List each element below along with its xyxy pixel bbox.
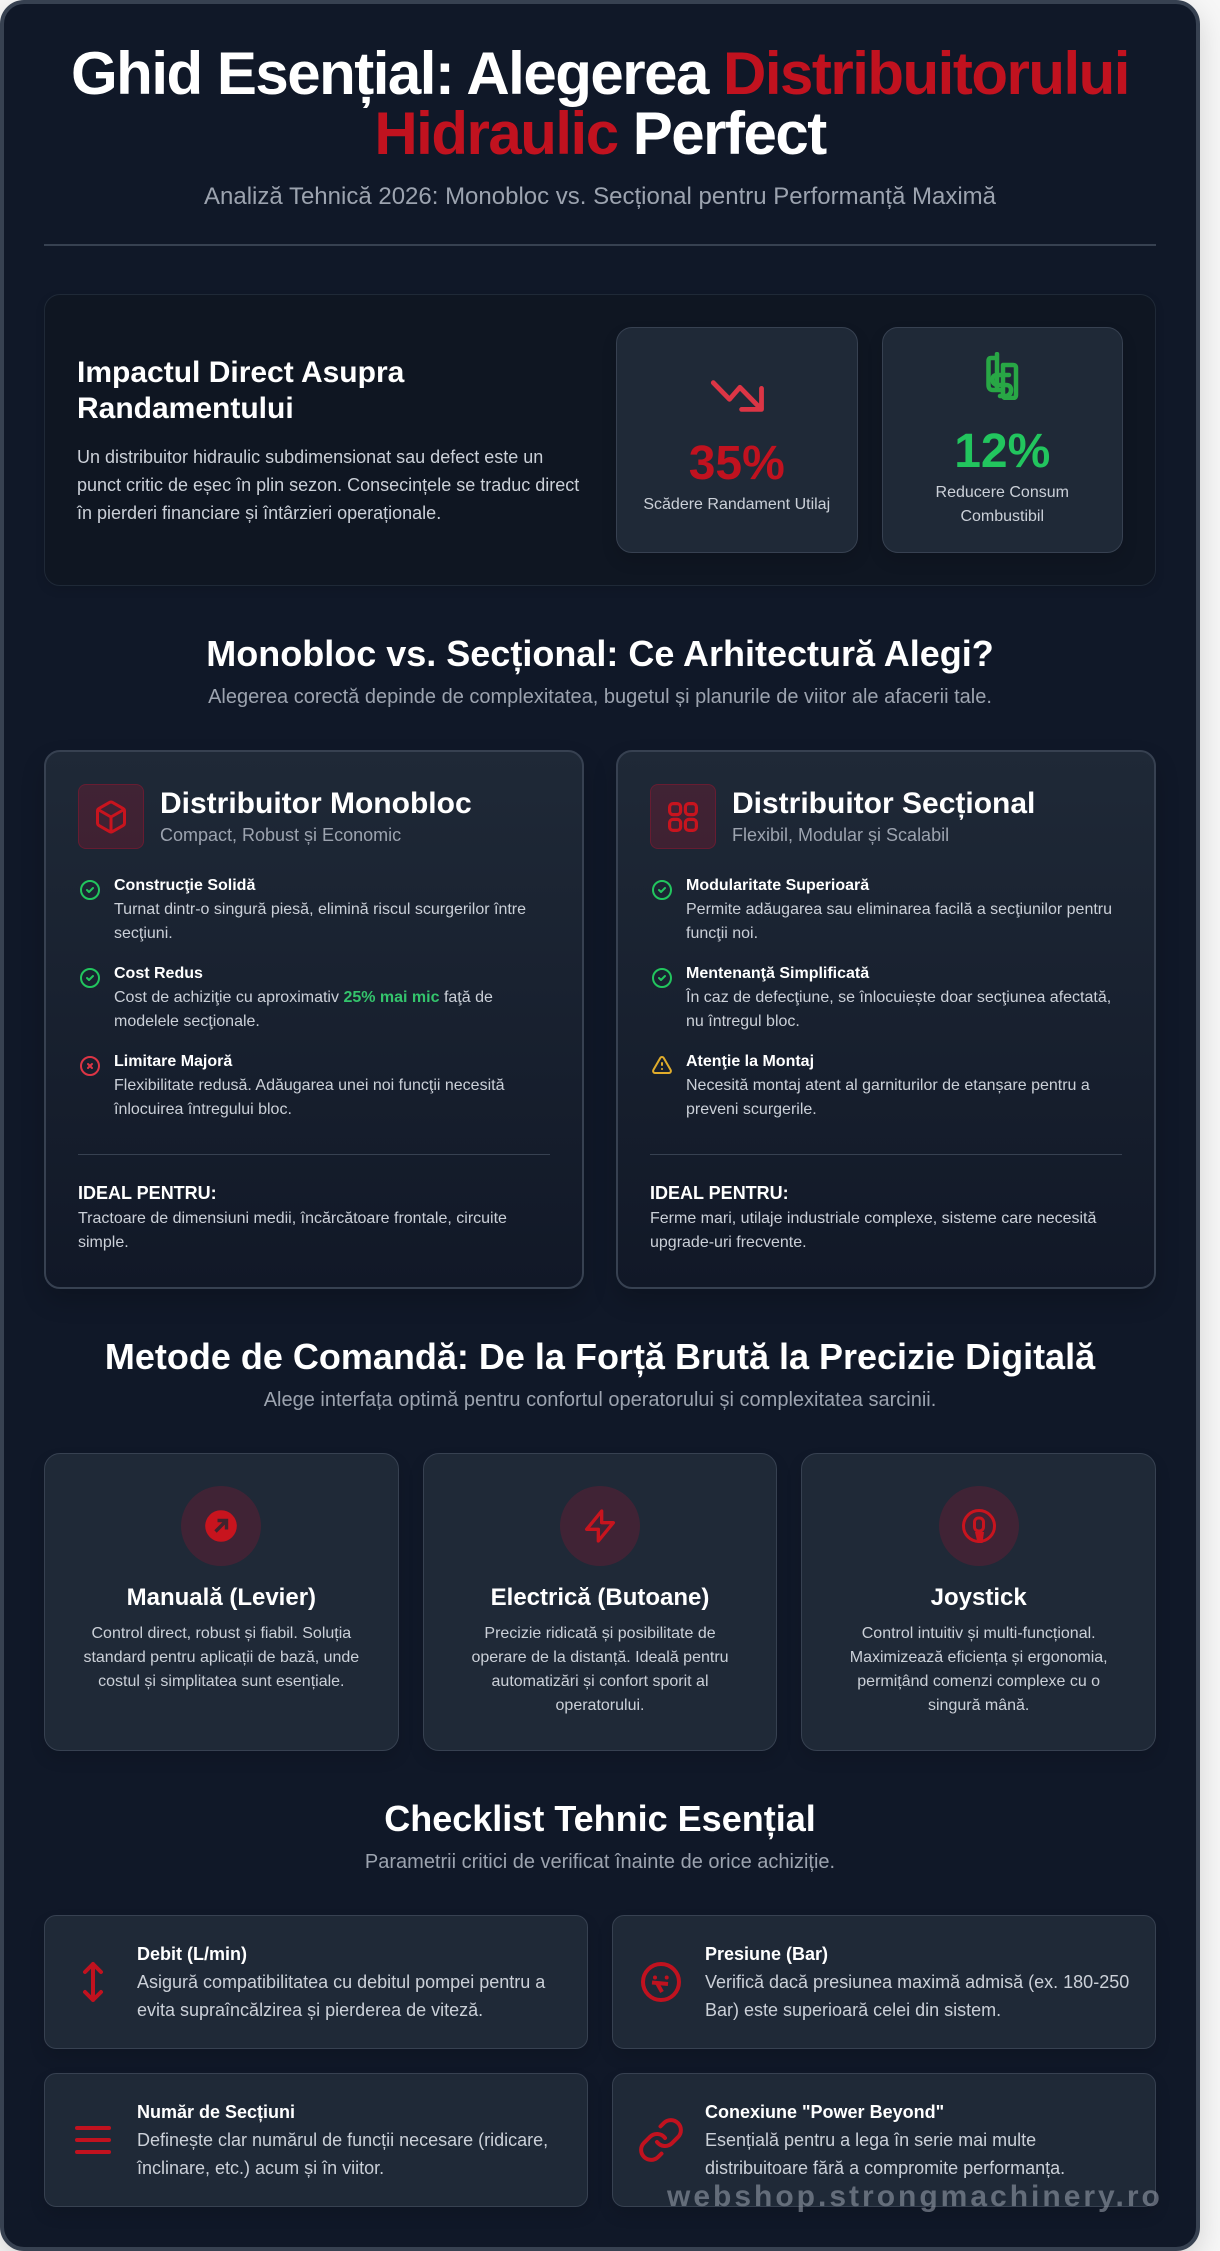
- item text: Esențială pentru a lega în serie mai multe distribuitoare fără a compromite performanța.: [705, 2130, 1065, 2178]
- stat value: 12%: [954, 425, 1050, 478]
- feature: mounting warning: Atenţie la Montaj: [686, 1053, 814, 1070]
- card title: Distribuitor Secțional: [732, 787, 1035, 820]
- impact heading: Impactul Direct Asupra Randamentului: [77, 356, 404, 425]
- panel: sectional: [616, 750, 1156, 1289]
- section heading: control methods: [105, 1336, 1096, 1411]
- item text: Presiune (Bar): [705, 1944, 828, 1964]
- item text: [705, 1944, 1129, 2020]
- section heading: architecture: [206, 633, 994, 708]
- feature: major limitation: Limitare Majoră: [114, 1053, 232, 1070]
- feature: simple maintenance: [652, 965, 1111, 1030]
- item text: Definește clar numărul de funcții necesare (ridicare, înclinare, etc.) acum și în viitor.: [137, 2130, 548, 2178]
- icon: cube: [78, 784, 144, 849]
- card title: Distribuitor Monobloc: [160, 787, 472, 820]
- stat card: 12%: [882, 327, 1123, 553]
- icon: grid: [650, 784, 716, 849]
- feature: low cost: Cost Redus: [114, 965, 203, 982]
- comparison panels: [44, 750, 1156, 1289]
- feature: modularity: Permite adăugarea sau eliminarea facilă a secţiunilor pentru funcţii noi.: [686, 901, 1112, 942]
- ideal for: Tractoare de dimensiuni medii, încărcătoare frontale, circuite simple.: [78, 1210, 507, 1251]
- stat card: 35%: [616, 327, 858, 553]
- icon: joystick: [939, 1486, 1019, 1566]
- feature: low cost: Cost de achiziţie cu aproximativ 25% mai mic faţă de modelele secţionale.: [114, 989, 493, 1030]
- section heading: checklist: [365, 1798, 835, 1873]
- item text: Număr de Secțiuni: [137, 2102, 295, 2122]
- item text: Asigură compatibilitatea cu debitul pompei pentru a evita supraîncălzirea și pierderea de viteză.: [137, 1972, 545, 2020]
- icon: trending down: [710, 380, 764, 412]
- item text: Debit (L/min): [137, 1944, 247, 1964]
- feature: solid build: Construcţie Solidă: [114, 877, 255, 894]
- card title: [160, 787, 472, 845]
- icon: money: [986, 352, 1018, 400]
- feature: solid build: Turnat dintr-o singură piesă, elimină riscul scurgerilor între secţiuni.: [114, 901, 526, 942]
- card header: [650, 784, 1035, 849]
- panel: section count: [44, 2073, 588, 2207]
- panel: monobloc: [44, 750, 584, 1289]
- card header: [78, 784, 472, 849]
- subtitle: Analiză Tehnică 2026: Monobloc vs. Secțional pentru Performanță Maximă: [204, 183, 996, 210]
- panel: manual: [44, 1453, 399, 1751]
- card title: Compact, Robust și Economic: [160, 825, 401, 845]
- header block: [44, 44, 1156, 246]
- subheading: Alege interfața optimă pentru confortul operatorului și complexitatea sarcinii.: [264, 1389, 936, 1411]
- item text: Conexiune "Power Beyond": [705, 2102, 944, 2122]
- feature: mounting warning: [652, 1053, 1090, 1118]
- watermark: webshop.strongmachinery.ro: [667, 2180, 1163, 2213]
- impact paragraph: Un distribuitor hidraulic subdimensionat sau defect este un punct critic de eșec în plin sezon. Consecințele se traduc direct în pierderi financiare și întârzieri operaționale.: [77, 447, 579, 523]
- feature: major limitation: [80, 1053, 505, 1118]
- subheading: Alegerea corectă depinde de complexitatea, bugetul și planurile de viitor ale afacerii tale.: [208, 686, 992, 708]
- panel: pressure: [612, 1915, 1156, 2049]
- panel: joystick: [801, 1453, 1156, 1751]
- icon: up-down arrow: [82, 1962, 104, 2002]
- title: Ghid Esențial: Alegerea Distribuitorului Hidraulic Perfect: [71, 40, 1129, 167]
- method title: Electrică (Butoane): [491, 1584, 709, 1611]
- icon: gauge: [641, 1962, 681, 2002]
- feature: modularity: Modularitate Superioară: [686, 877, 869, 894]
- stat label: Reducere Consum Combustibil: [936, 484, 1069, 525]
- heading: Metode de Comandă: De la Forță Brută la Precizie Digitală: [105, 1336, 1095, 1377]
- feature list: [78, 874, 550, 1155]
- feature list: [650, 874, 1122, 1155]
- ideal for: Ferme mari, utilaje industriale complexe, sisteme care necesită upgrade-uri frecvente.: [650, 1210, 1096, 1251]
- method text: Control direct, robust și fiabil. Soluția standard pentru aplicații de bază, unde costul și simplitatea sunt esențiale.: [83, 1625, 359, 1690]
- icon: chain link: [639, 2118, 683, 2162]
- control method cards: [44, 1453, 1156, 1751]
- stat label: Scădere Randament Utilaj: [643, 496, 830, 513]
- method title: Manuală (Levier): [127, 1584, 316, 1611]
- subheading: Parametrii critici de verificat înainte de orice achiziție.: [365, 1851, 835, 1873]
- ideal for: IDEAL PENTRU:: [650, 1183, 789, 1203]
- heading: Monobloc vs. Secțional: Ce Arhitectură Alegi?: [206, 633, 994, 674]
- icon: lightning: [560, 1486, 640, 1566]
- stat value: 35%: [689, 437, 785, 490]
- feature: major limitation: Flexibilitate redusă. Adăugarea unei noi funcţii necesită înlocuirea întregului bloc.: [114, 1077, 504, 1118]
- checklist cards: [44, 1915, 1156, 2207]
- method text: Control intuitiv și multi-funcțional. Maximizează eficiența și ergonomia, permițând comenzi complexe cu o singură mână.: [850, 1625, 1108, 1714]
- feature: simple maintenance: Mentenanţă Simplificată: [686, 965, 869, 982]
- icon: menu lines: [75, 2126, 111, 2154]
- ideal for: [650, 1183, 1096, 1251]
- method title: Joystick: [931, 1584, 1027, 1611]
- feature: modularity: [652, 877, 1112, 942]
- card title: Flexibil, Modular și Scalabil: [732, 825, 949, 845]
- heading: Checklist Tehnic Esențial: [384, 1798, 816, 1839]
- panel: electric: [423, 1453, 777, 1751]
- panel: power beyond: [612, 2073, 1156, 2207]
- feature: mounting warning: Necesită montaj atent al garniturilor de etanșare pentru a preveni scurgerile.: [686, 1077, 1090, 1118]
- feature: low cost: [80, 965, 493, 1030]
- ideal for: [78, 1183, 507, 1251]
- method text: Precizie ridicată și posibilitate de operare de la distanță. Ideală pentru automatizări și confort sporit al operatorului.: [471, 1625, 729, 1714]
- item text: Verifică dacă presiunea maximă admisă (ex. 180-250 Bar) este superioară celei din sistem.: [705, 1972, 1129, 2020]
- stat cards: [616, 327, 1123, 553]
- feature: simple maintenance: În caz de defecţiune, se înlocuiește doar secţiunea afectată, nu întregul bloc.: [686, 989, 1111, 1030]
- item text: [705, 2102, 1065, 2178]
- feature: solid build: [80, 877, 526, 942]
- panel: flow: [44, 1915, 588, 2049]
- icon: lever: [181, 1486, 261, 1566]
- impact text block: [76, 356, 580, 523]
- panel: impact on efficiency: [44, 294, 1156, 586]
- item text: [136, 2102, 548, 2178]
- ideal for: IDEAL PENTRU:: [78, 1183, 217, 1203]
- item text: [137, 1944, 546, 2020]
- card title: [732, 787, 1035, 845]
